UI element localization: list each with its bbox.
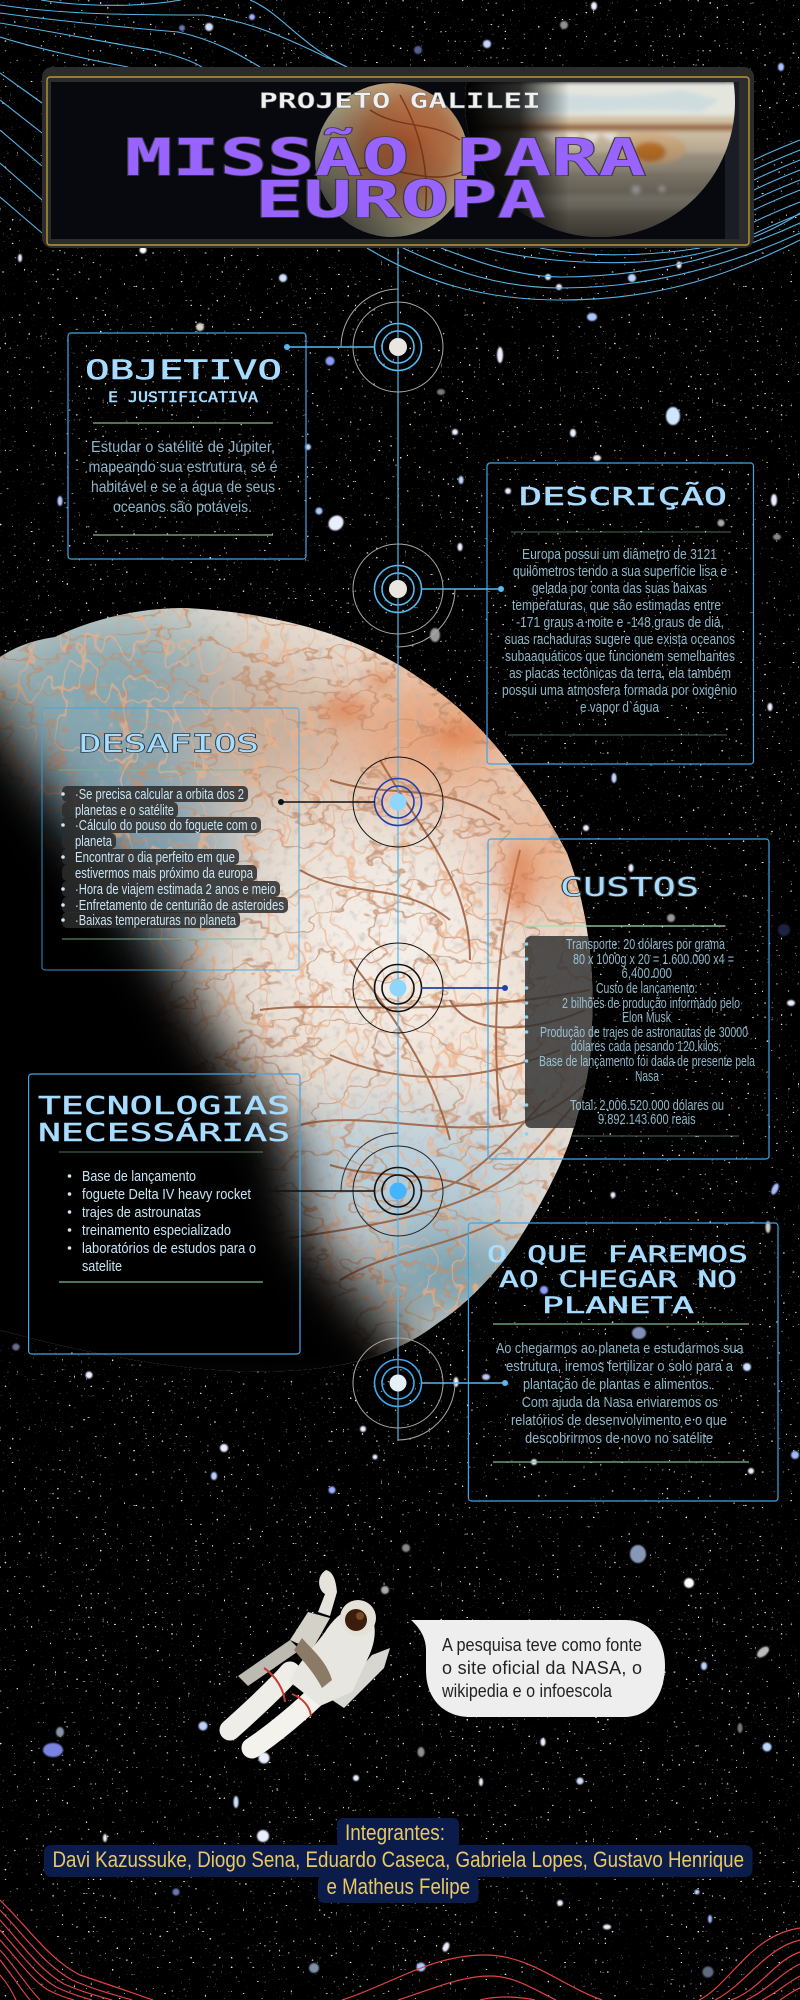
- cost list: Elon Musk: [622, 1009, 671, 1026]
- credits text: Integrantes:: [345, 1820, 445, 1845]
- subheading: E JUSTIFICATIVA: [108, 390, 259, 406]
- timeline node 5: [266, 1133, 443, 1236]
- timeline node 3: [278, 757, 443, 847]
- header gold border: [47, 77, 749, 245]
- cost list: 9.892.143.600 reais: [598, 1111, 696, 1128]
- bullet list: ·Cálculo do pouso do foguete com o: [75, 817, 257, 834]
- decorative blue wave lines: [0, 0, 800, 300]
- body text: [88, 439, 278, 516]
- bullet list: trajes de astrounatas: [82, 1204, 201, 1221]
- team credits: [44, 1818, 752, 1903]
- cost list: dólares cada pesando 120 kilos;: [571, 1038, 722, 1055]
- bullet list: planetas e o satélite: [75, 802, 174, 819]
- panel: o que faremos: [468, 1223, 778, 1501]
- body text: [496, 1340, 744, 1447]
- callout: speech bubble: [411, 1620, 665, 1717]
- cost list: [525, 936, 755, 1136]
- cost list: Transporte: 20 dólares por grama: [566, 936, 725, 953]
- body text: mapeando sua estrutura, se é: [88, 459, 278, 476]
- heading: o que faremos: [487, 1243, 748, 1319]
- bullet list: ·Enfretamento de centurião de asteroides: [75, 897, 284, 914]
- bullet list: ·Baixas temperaturas no planeta: [75, 912, 236, 929]
- body text: Com ajuda da Nasa enviaremos os: [522, 1394, 718, 1411]
- heading: tecnologias necessarias: NECESSÁRIAS: [38, 1118, 290, 1147]
- credits text: [52, 1820, 744, 1899]
- bullet list: [61, 786, 284, 929]
- header frame: [42, 67, 754, 248]
- text highlights: [62, 786, 288, 928]
- callout text: o site oficial da NASA, o: [442, 1658, 642, 1678]
- body text: estrutura, iremos fertilizar o solo para a: [506, 1358, 734, 1375]
- callout text: [441, 1635, 642, 1701]
- bullet list: foguete Delta IV heavy rocket: [82, 1186, 252, 1203]
- panel: objetivo: [68, 333, 306, 559]
- body text: plantação de plantas e alimentos.: [523, 1376, 712, 1393]
- bullet list: Encontrar o dia perfeito em que: [75, 849, 235, 866]
- panel: custos: [488, 839, 769, 1159]
- panel: desafios: [42, 708, 299, 970]
- bullet list: ·Se precisa calcular a orbita dos 2: [75, 786, 244, 803]
- timeline node 4: [353, 943, 508, 1033]
- bullet list: treinamento especializado: [82, 1222, 231, 1239]
- heading: o que faremos: O QUE FAREMOS: [487, 1243, 748, 1268]
- bullet list: estivermos mais próximo da europa: [75, 865, 253, 882]
- dark text backing over planet: [525, 936, 592, 1128]
- body text: temperaturas, que são estimadas entre: [512, 597, 721, 614]
- panel: descricao: [487, 463, 754, 764]
- body text: Estudar o satélite de Júpiter,: [91, 439, 275, 456]
- body text: [502, 546, 737, 716]
- heading: desafios: DESAFIOS: [79, 729, 259, 758]
- body text: Europa possui um diâmetro de 3121: [522, 546, 717, 563]
- body text: Ao chegarmos ao planeta e estudarmos sua: [496, 1340, 744, 1357]
- heading: tecnologias necessarias: TECNOLOGIAS: [38, 1091, 290, 1120]
- timeline node 2: [353, 544, 504, 647]
- body text: e vapor d`água: [580, 699, 660, 716]
- body text: possui uma atmosfera formada por oxigênio: [502, 682, 737, 699]
- body text: -171 graus a noite e -148 graus de dia,: [516, 614, 724, 631]
- panel: tecnologias necessarias: [29, 1074, 300, 1354]
- body text: habitável e se a água de seus: [91, 479, 275, 496]
- cost list: 6.400.000: [622, 965, 672, 982]
- body text: subaaquáticos que funcionem semelhantes: [505, 648, 735, 665]
- bullet list: satelite: [82, 1258, 122, 1275]
- cost list: 80 x 1000g x 20 = 1.600.000 x4 =: [573, 951, 734, 968]
- decorative red wave lines: [0, 1900, 800, 2000]
- timeline node 1: [284, 289, 443, 392]
- heading: objetivo: OBJETIVO: [85, 355, 282, 386]
- header image: Europa and Jupiter: [51, 82, 740, 239]
- subtitle: PROJETO GALILEI: [259, 89, 541, 113]
- bullet list: laboratórios de estudos para o: [82, 1240, 256, 1257]
- heading: descricao: DESCRIÇÃO: [519, 481, 727, 511]
- timeline vertical line: [397, 239, 399, 1441]
- body text: suas rachaduras sugere que exista oceanos: [505, 631, 735, 648]
- main title: MISSÃO PARA: [125, 127, 646, 188]
- timeline node 6: [353, 1338, 508, 1440]
- icon: astronaut: [230, 1570, 390, 1748]
- bullet list: [68, 1168, 256, 1275]
- heading: tecnologias necessarias: [38, 1091, 290, 1147]
- planet Europa: [0, 600, 600, 1420]
- credits highlight: [44, 1818, 752, 1903]
- bullet list: planeta: [75, 833, 112, 850]
- header banner: [42, 67, 754, 248]
- callout text: A pesquisa teve como fonte: [442, 1635, 642, 1655]
- body text: relatórios de desenvolvimento e o que: [511, 1412, 727, 1429]
- cost list: Total: 2.006.520.000 dólares ou: [570, 1097, 724, 1114]
- bullet list: Base de lançamento: [82, 1168, 196, 1185]
- cost list: Custo de lançamento:: [596, 980, 698, 997]
- callout text: wikipedia e o infoescola: [441, 1681, 613, 1701]
- body text: quilômetros tendo a sua superfície lisa e: [513, 563, 727, 580]
- body text: gelada por conta das suas baixas: [532, 580, 707, 597]
- heading: custos: CUSTOS: [560, 873, 699, 903]
- bullet list: ·Hora de viajem estimada 2 anos e meio: [75, 881, 276, 898]
- heading: o que faremos: PLANETA: [542, 1294, 694, 1319]
- cost list: Nasa: [635, 1068, 659, 1085]
- heading: o que faremos: AO CHEGAR NO: [499, 1268, 737, 1293]
- body text: as placas tectônicas da terra, ela também: [509, 665, 731, 682]
- body text: descobrirmos de novo no satélite: [525, 1430, 713, 1447]
- main title: [125, 127, 646, 230]
- credits text: e Matheus Felipe: [326, 1874, 470, 1899]
- main title: EUROPA: [255, 171, 546, 230]
- body text: oceanos são potáveis.: [113, 499, 252, 516]
